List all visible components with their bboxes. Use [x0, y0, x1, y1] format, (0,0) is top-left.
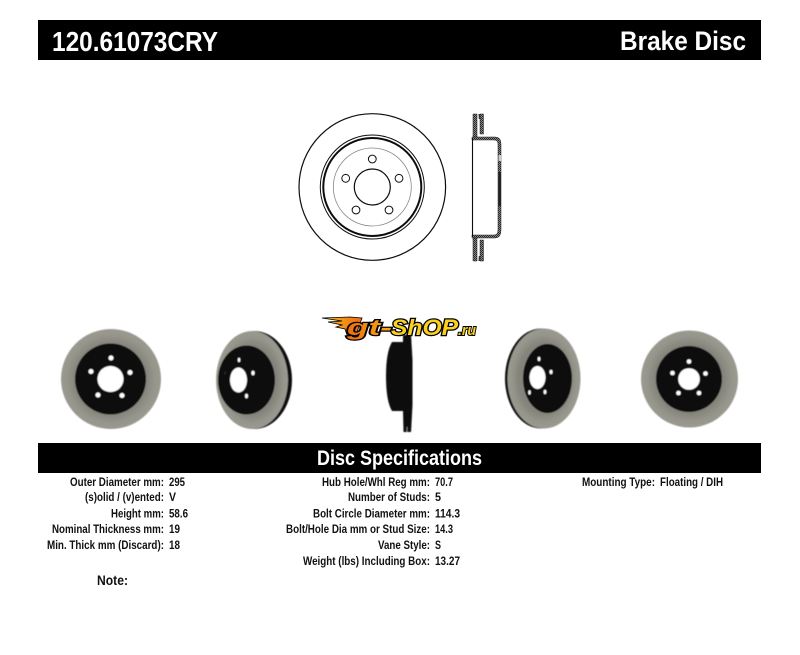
- logo: gt-shop.ru: gt-: [345, 315, 392, 340]
- technical drawing: cross-section view: [472, 114, 501, 261]
- note label: Note:: [97, 572, 128, 588]
- specs column 2: [286, 475, 460, 568]
- specs column 1: [47, 475, 188, 552]
- logo: gt-shop.ru: [322, 315, 476, 340]
- technical drawing: front view: [299, 114, 446, 260]
- specs column 2: 14.3: [435, 522, 453, 536]
- specs column 3: [582, 475, 723, 489]
- logo flames: [322, 317, 362, 335]
- specs column 1: Min. Thick mm (Discard):: [47, 538, 164, 552]
- logo: gt-shop.ru: .ru: [458, 322, 476, 339]
- specs column 1: 18: [169, 538, 180, 552]
- specs column 2: Bolt Circle Diameter mm:: [313, 506, 430, 520]
- specs column 2: Weight (lbs) Including Box:: [303, 554, 430, 568]
- specs column 3: Floating / DIH: [660, 475, 723, 489]
- specs column 3: Mounting Type:: [582, 475, 655, 489]
- specs column 2: S: [435, 538, 441, 552]
- photo: disc side view: [386, 335, 412, 432]
- specs column 1: Outer Diameter mm:: [70, 475, 164, 489]
- specs column 1: Nominal Thickness mm:: [52, 522, 164, 536]
- specs column 2: Hub Hole/Whl Reg mm:: [322, 475, 430, 489]
- photo: disc front view, rotated: [641, 330, 738, 428]
- specs column 2: Vane Style:: [378, 538, 430, 552]
- product type heading: Brake Disc: [620, 26, 746, 56]
- header bar: [38, 20, 761, 60]
- specs column 2: 70.7: [435, 475, 453, 489]
- specs column 2: 5: [435, 490, 441, 504]
- specs column 1: 295: [169, 475, 185, 489]
- specs column 1: 58.6: [169, 506, 188, 520]
- specs column 1: V: [169, 490, 176, 504]
- logo: gt-shop.ru: ShOP: [391, 315, 458, 340]
- specifications header bar: Disc Specifications: [317, 447, 482, 470]
- photo: disc angled left: [505, 328, 580, 428]
- part number title: 120.61073CRY: [52, 26, 218, 57]
- specifications header bar: [38, 443, 761, 473]
- specs column 2: Bolt/Hole Dia mm or Stud Size:: [286, 522, 430, 536]
- photo: disc front view: [61, 329, 161, 429]
- photo: disc angled right: [216, 331, 292, 429]
- specs column 1: 19: [169, 522, 180, 536]
- specs column 2: 114.3: [435, 506, 460, 520]
- specs column 2: Number of Studs:: [348, 490, 430, 504]
- specs column 2: 13.27: [435, 554, 460, 568]
- specs column 1: Height mm:: [111, 506, 164, 520]
- specs column 1: (s)olid / (v)ented:: [85, 490, 164, 504]
